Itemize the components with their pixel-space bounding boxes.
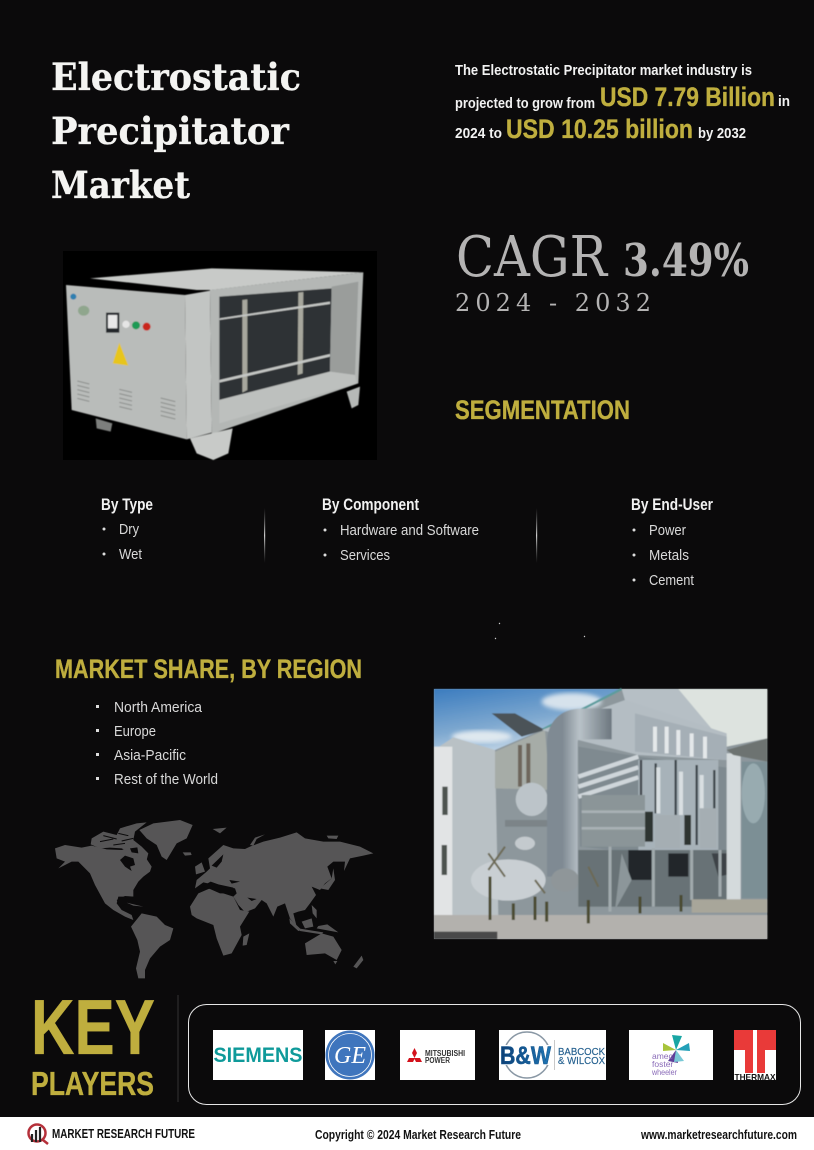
market growth summary text — [455, 62, 790, 144]
title: Electrostatic — [51, 55, 301, 99]
logo: Amec Foster Wheeler: wheeler — [651, 1067, 677, 1077]
logo: Amec Foster Wheeler: foster — [652, 1059, 673, 1069]
market growth summary text: USD 7.79 Billion — [600, 82, 775, 112]
key players heading: PLAYERS — [31, 1065, 154, 1102]
logo: Amec Foster Wheeler — [629, 1030, 713, 1080]
key players heading — [31, 983, 155, 1102]
CAGR figure: 3.49% — [623, 234, 749, 287]
title — [51, 55, 301, 207]
CAGR figure: 2024 - 2032 — [455, 289, 651, 317]
region list: North America — [114, 699, 203, 716]
key players panel — [188, 1004, 800, 1104]
logo: Babcock & Wilcox: & WILCOX — [558, 1056, 605, 1067]
image: industrial precipitator plant — [434, 689, 767, 939]
logo: Babcock & Wilcox: BABCOCK — [558, 1047, 605, 1058]
logo: Thermax — [734, 1030, 776, 1082]
market growth summary text: 2024 to — [455, 125, 502, 142]
segment list: by component: By Component — [322, 495, 419, 514]
CAGR figure: CAGR — [456, 225, 609, 290]
segment list: by type: Wet — [119, 546, 143, 563]
logo: Thermax: THERMAX — [734, 1072, 776, 1082]
market growth summary text: in — [778, 93, 790, 110]
image: electrostatic precipitator unit — [63, 251, 377, 460]
heading: market share by region: MARKET SHARE, BY REGION — [55, 654, 362, 684]
region list: Rest of the World — [114, 771, 218, 788]
CAGR figure — [455, 225, 749, 317]
segment list: by end-user: Power — [649, 522, 686, 539]
copyright: Copyright © 2024 Market Research Future — [315, 1128, 521, 1142]
title: Precipitator — [51, 109, 289, 153]
logo: Siemens — [213, 1030, 303, 1080]
segment list: by end-user: By End-User — [631, 495, 713, 514]
logo: GE — [325, 1030, 375, 1080]
key players heading: KEY — [31, 983, 155, 1071]
segment list: by component: Services — [340, 547, 390, 564]
market growth summary text: The Electrostatic Precipitator market industry is — [455, 62, 752, 79]
market growth summary text: USD 10.25 billion — [506, 114, 693, 144]
region list: Europe — [114, 723, 156, 740]
logo: Siemens: SIEMENS — [214, 1044, 302, 1067]
logo: market research future: MARKET RESEARCH FUTURE — [52, 1127, 195, 1141]
logo: Babcock & Wilcox: B&W — [500, 1042, 551, 1070]
market growth summary text: projected to grow from — [455, 95, 595, 112]
logo: Mitsubishi Power: POWER — [425, 1056, 450, 1065]
segment list: by type — [101, 495, 153, 563]
segment list: by type: Dry — [119, 521, 139, 538]
world map — [55, 820, 373, 978]
logo: Mitsubishi Power — [400, 1030, 475, 1080]
logo: GE: GE — [334, 1043, 366, 1069]
segment list: by component: Hardware and Software — [340, 522, 479, 539]
logo: Babcock & Wilcox — [499, 1030, 606, 1080]
title: Market — [51, 163, 190, 207]
segment list: by component — [322, 495, 479, 564]
logo: Amec Foster Wheeler: amec — [652, 1051, 674, 1061]
segment list: by end-user: Metals — [649, 547, 689, 564]
segment list: by type: By Type — [101, 495, 153, 514]
logo: Mitsubishi Power: MITSUBISHI — [425, 1049, 465, 1058]
heading: segmentation: SEGMENTATION — [455, 395, 630, 425]
logo: market research future — [28, 1124, 195, 1144]
footer — [0, 1117, 814, 1150]
region list: Asia-Pacific — [114, 747, 186, 764]
segment list: by end-user — [631, 495, 713, 589]
market growth summary text: by 2032 — [698, 125, 746, 142]
region list — [96, 699, 218, 788]
segment list: by end-user: Cement — [649, 572, 695, 589]
